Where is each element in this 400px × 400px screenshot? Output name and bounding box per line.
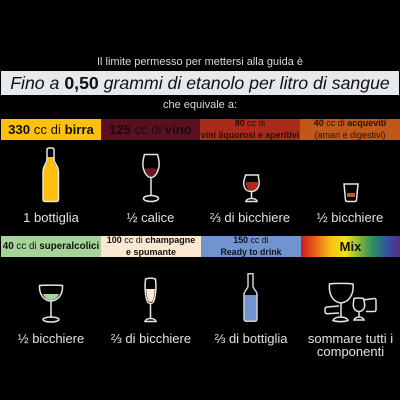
caption: bottiglia: 1 bottiglia — [23, 210, 79, 225]
caption: bicchiere superalcolici: ½ bicchiere — [18, 331, 84, 346]
label: superalcolici — [1, 236, 101, 257]
icon: mixed drinks — [324, 282, 377, 322]
label: superalcolici: 40 cc di superalcolici — [3, 241, 99, 252]
label: ready to drink: Ready to drink — [220, 246, 282, 256]
headline band: 0,50 — [64, 72, 99, 92]
label: birra — [1, 119, 101, 140]
icon: liqueur glass — [242, 174, 260, 202]
label: birra: 330 cc di birra — [8, 122, 94, 137]
caption: sommare componenti: componenti — [317, 344, 384, 359]
caption: bicchiere champagne: ⅔ di bicchiere — [111, 331, 191, 346]
label: vini liquorosi: vini liquorosi e aperitivi — [201, 130, 299, 140]
headline band: Fino a grammi di etanolo per litro di sangue — [10, 72, 390, 92]
label: ready to drink: 150 cc di — [233, 235, 269, 245]
label: mix — [301, 236, 400, 257]
icon: coupe glass — [38, 284, 64, 323]
caption: bicchiere liquoroso: ⅔ di bicchiere — [210, 210, 290, 225]
label: mix: Mix — [340, 239, 361, 254]
subheading text: che equivale a: — [163, 99, 237, 111]
icon: beer bottle — [42, 147, 60, 202]
label: vino — [101, 119, 200, 140]
caption: sommare componenti — [308, 331, 393, 359]
icon: ready to drink bottle — [243, 273, 258, 322]
icon: wine glass — [142, 154, 160, 202]
intro text: Il limite permesso per mettersi alla guida è — [97, 56, 303, 68]
caption: bicchiere acquavite: ½ bicchiere — [317, 210, 383, 225]
label: champagne: e spumante — [126, 246, 176, 256]
icon: champagne flute — [144, 277, 157, 322]
label: acquaviti — [300, 119, 400, 140]
label: vini liquorosi — [200, 119, 300, 140]
label: champagne: 100 cc di champagne — [107, 235, 195, 245]
label: acquaviti: (amari e digestivi) — [314, 130, 386, 140]
label: vino: 125 cc di vino — [109, 122, 192, 137]
caption: sommare componenti: sommare tutti i — [308, 331, 393, 346]
label: champagne — [101, 236, 201, 257]
label: acquaviti: 40 cc di acqueviti — [314, 118, 386, 128]
label: vini liquorosi: 80 cc di — [235, 118, 265, 128]
label: ready to drink — [201, 236, 301, 257]
caption: bottiglia ready to drink: ⅔ di bottiglia — [214, 331, 288, 346]
icon: shot tumbler — [343, 183, 359, 202]
caption: calice: ½ calice — [127, 210, 174, 225]
